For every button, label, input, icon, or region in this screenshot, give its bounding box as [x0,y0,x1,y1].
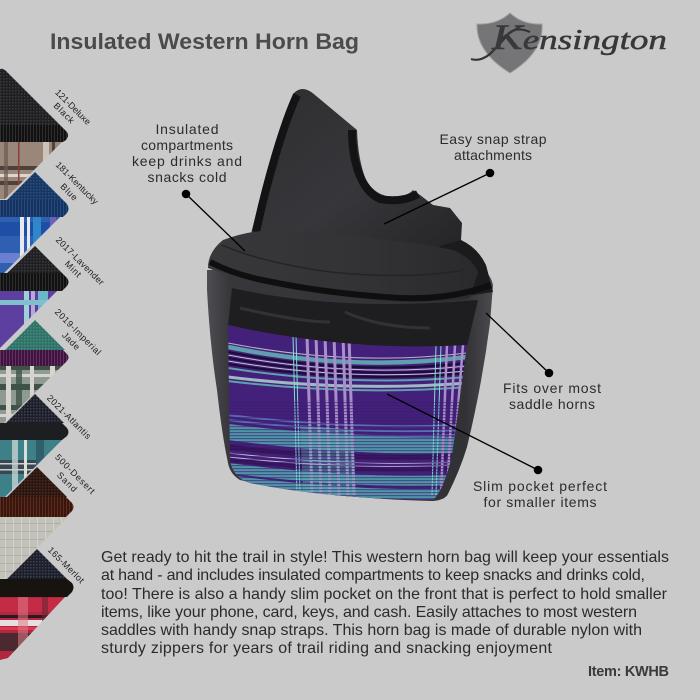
lid outer ring [440,240,493,300]
description paragraph [101,549,669,657]
swatch labels: 2021-Atlantis [45,393,93,441]
callout: insulated compartments: Insulated [156,121,218,137]
bag front black band [228,288,478,347]
swatch labels: Blue [58,181,80,203]
swatch labels: 2017-Lavender [54,235,106,287]
swatch labels: Black [52,101,77,126]
callout: slim pocket: Slim pocket perfect [473,478,607,494]
callout: insulated compartments: keep drinks and [132,153,242,169]
swatch labels: Mint [63,259,84,280]
description paragraph: at hand - and includes insulated compartments to keep snacks and drinks cold, [101,567,645,584]
swatch labels: 500-Desert [53,452,97,496]
swatch: 121-Deluxe Black [0,69,68,199]
swatch labels: 181-Kentucky [54,160,101,207]
flap binding [256,95,418,232]
description paragraph: items, like your phone, card, keys, and cash. Easily attaches to most western [101,604,637,621]
swatch: 2021-Atlantis [0,394,68,497]
callout: insulated compartments: snacks cold [148,169,226,185]
logo: Kensington [471,13,667,73]
callout: fits over saddle horns [486,313,601,412]
logo: Kensington: Kensington [491,17,667,57]
plaid pocket [228,325,467,500]
description paragraph: sturdy zippers for years of trail riding and snacking enjoyment [101,640,553,657]
callout: slim pocket: for smaller items [484,494,596,510]
callout: insulated compartments: compartments [141,137,233,153]
zipper [210,262,491,298]
bag back flap [251,89,462,252]
zipper lid [208,230,478,302]
bag body [207,260,493,501]
item code: Item: KWHB [588,664,669,680]
swatch labels: Sand [55,470,79,494]
callout: fits over saddle horns: Fits over most [503,380,601,396]
swatch: 181-Kentucky Blue [0,172,68,274]
swatch labels: 165-Merlot [46,545,86,585]
swatch labels: 2019-Imperial [53,307,103,357]
callout: easy snap strap [384,131,547,224]
description paragraph: saddles with handy snap straps. This horn bag is made of durable nylon with [101,622,642,639]
swatch: 165-Merlot [0,549,74,660]
swatch labels [45,87,106,585]
description paragraph: too! There is also a handy slim pocket on the front that is perfect to hold smaller [101,586,668,603]
title: Insulated Western Horn Bag [50,29,359,54]
swatch: 2017-Lavender Mint [0,246,68,348]
swatch labels: 121-Deluxe [53,87,93,127]
callout: easy snap strap: attachments [454,147,532,163]
callout: slim pocket [387,394,607,510]
swatch labels: Jade [60,330,82,352]
description paragraph: Get ready to hit the trail in style! This western horn bag will keep your essentials [101,549,669,566]
callout: easy snap strap: Easy snap strap [440,131,547,147]
bag illustration [207,89,493,505]
callout: insulated compartments [132,121,245,251]
swatch: 500-Desert Sand [0,467,74,578]
callout: fits over saddle horns: saddle horns [509,396,595,412]
swatch: 2019-Imperial Jade [0,320,68,424]
